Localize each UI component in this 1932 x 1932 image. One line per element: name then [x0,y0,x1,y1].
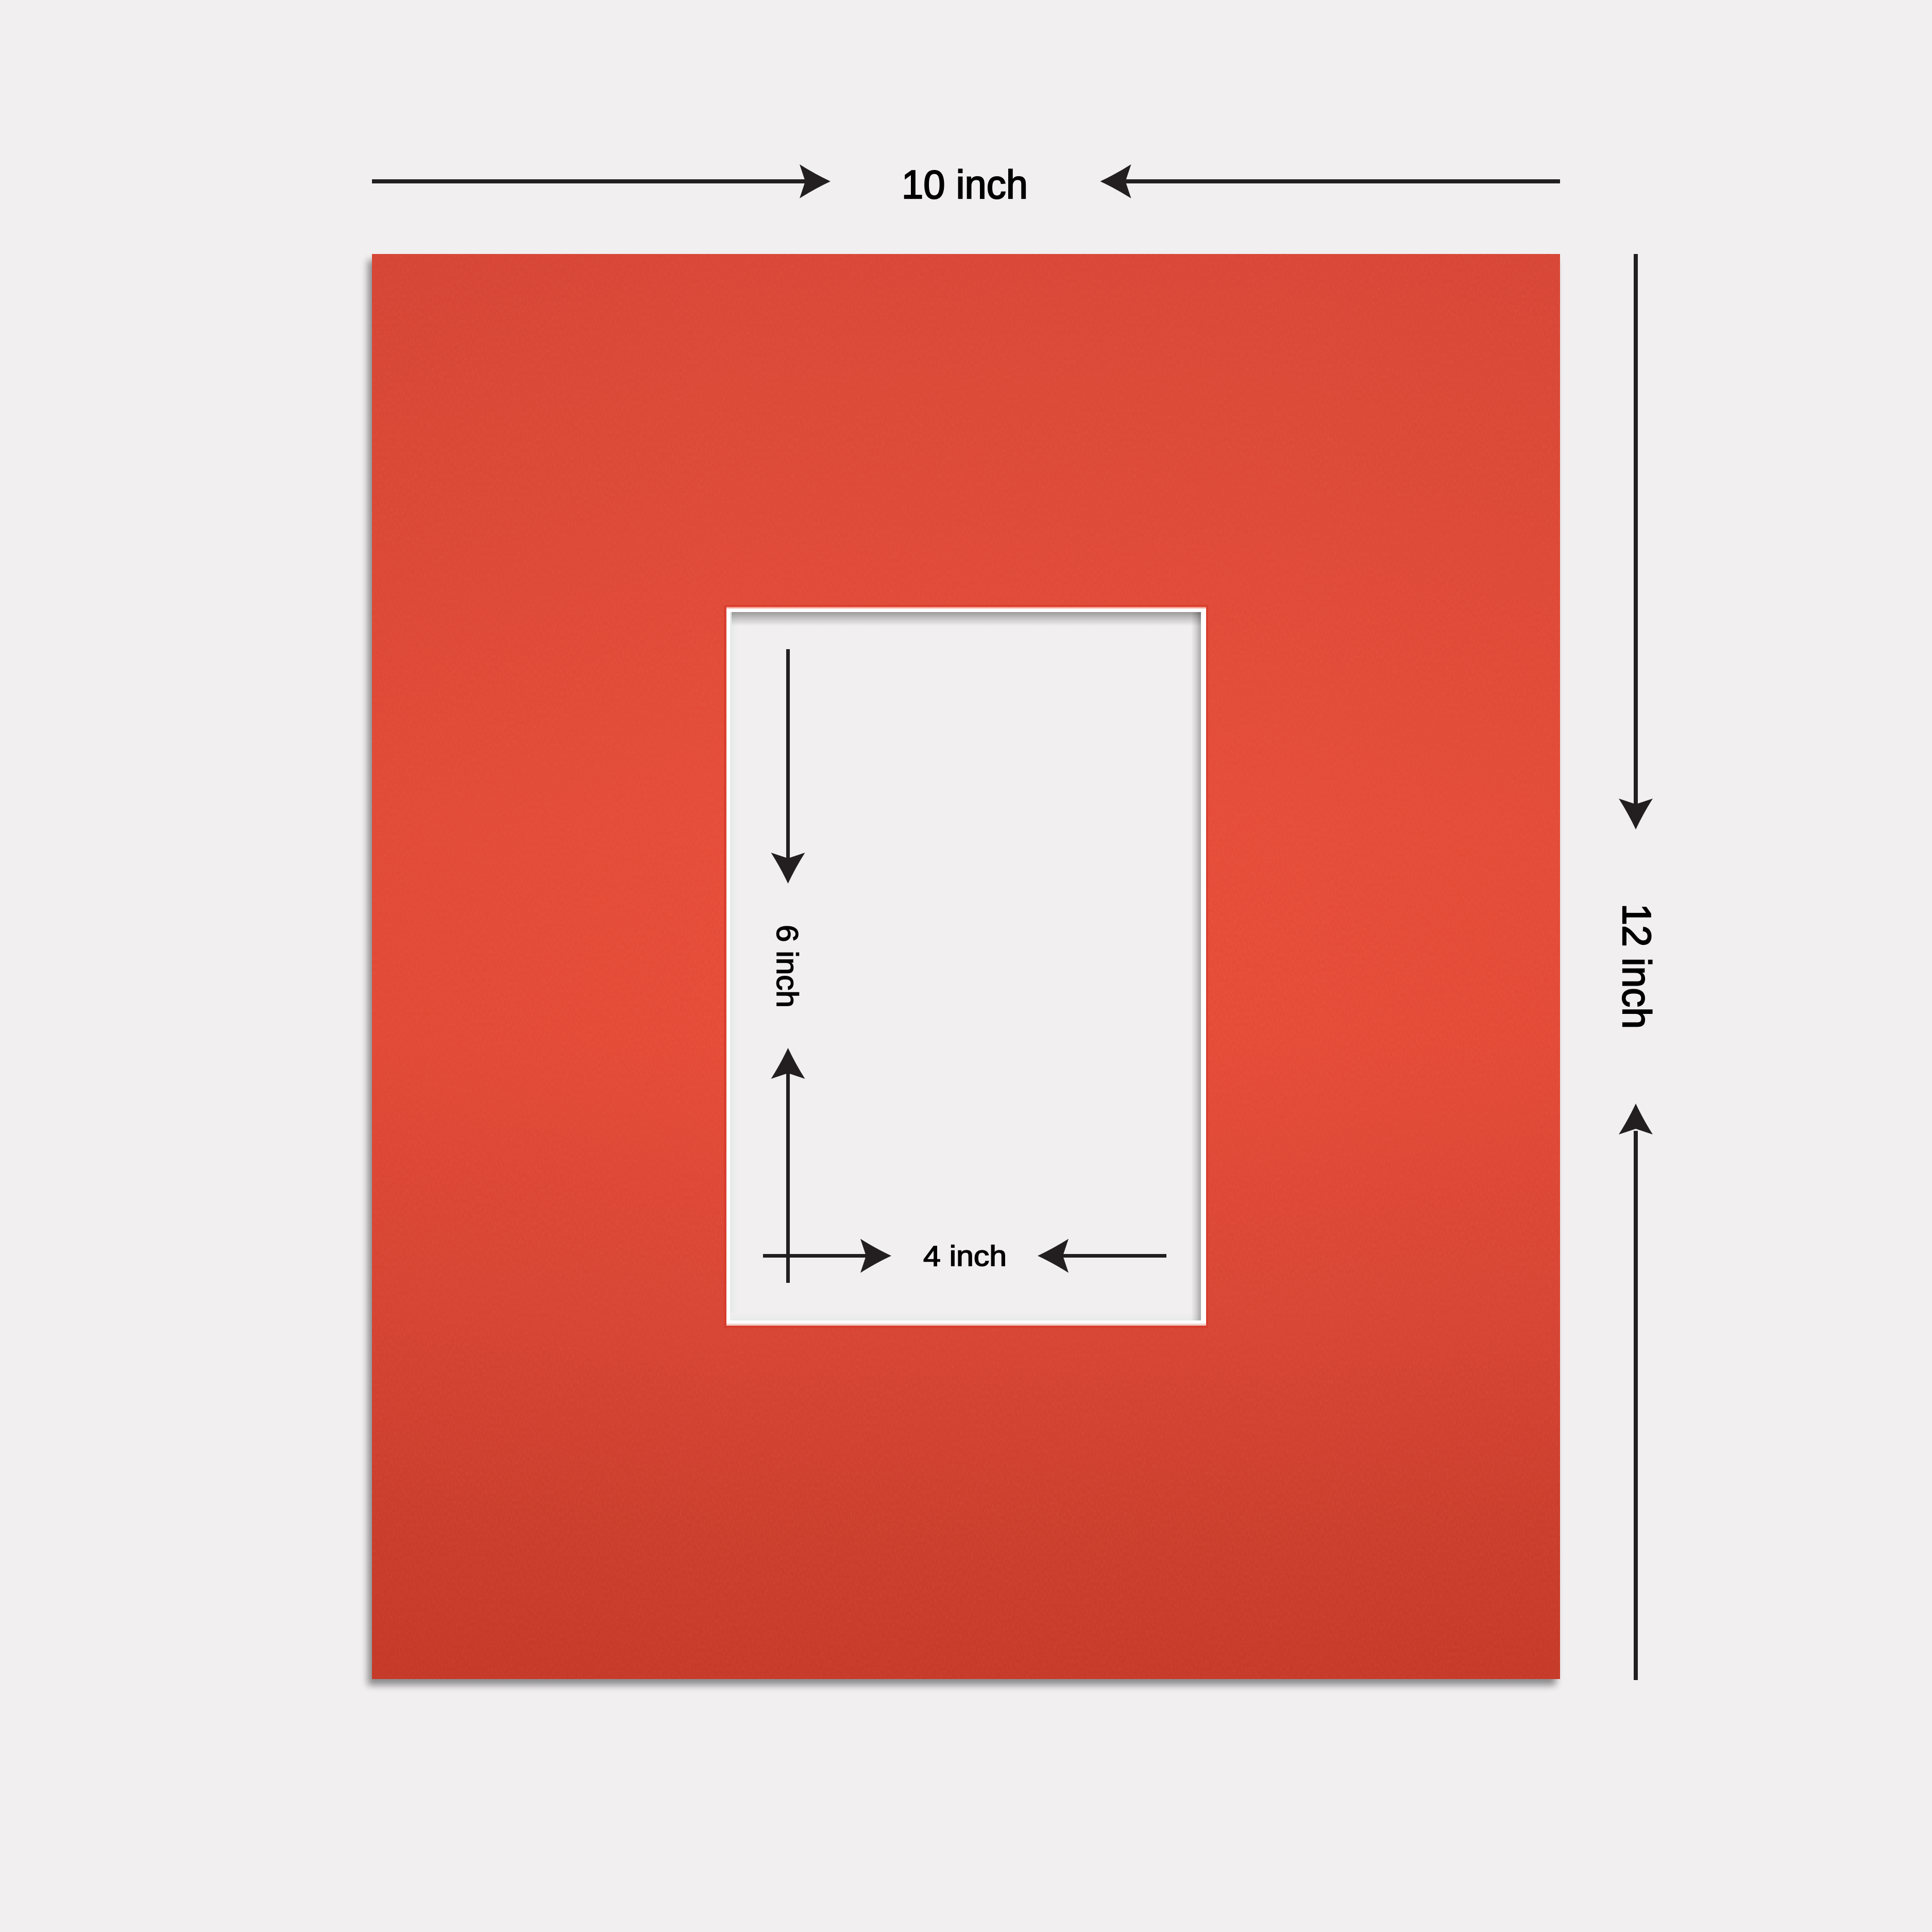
paper texture [372,254,1560,1679]
bevel bottom highlight [726,1324,1206,1326]
red mat surface [372,254,1560,1679]
label: 6 inch: 6 inch [770,925,804,1008]
arrow: window width, pointing left [1038,1239,1166,1273]
inner right shadow [1191,612,1201,1320]
arrow: window height, pointing up [771,1048,805,1283]
arrow: outer width, pointing right [372,164,831,198]
arrow: window height, pointing down [771,649,805,884]
window cut shadow line [724,605,1208,1328]
arrow: window width, pointing right [763,1239,891,1273]
arrow: outer width, pointing left [1100,164,1560,198]
mat board drop shadow [368,260,1556,1685]
window opening [730,612,1201,1320]
label: 12 inch: 12 inch [1614,904,1659,1029]
window white bevel [726,607,1206,1326]
label: 4 inch: 4 inch [923,1240,1007,1272]
mat edge tint [372,254,1560,1679]
inner bottom shade [730,1313,1201,1320]
mat board with window cut-out [372,254,1560,1679]
bevel top highlight [726,607,1206,608]
inner left shade [730,612,738,1320]
arrow: outer height, pointing down [1619,254,1653,829]
inner top shadow [732,612,1201,626]
label: 10 inch: 10 inch [902,162,1028,207]
arrow: outer height, pointing up [1619,1104,1653,1680]
